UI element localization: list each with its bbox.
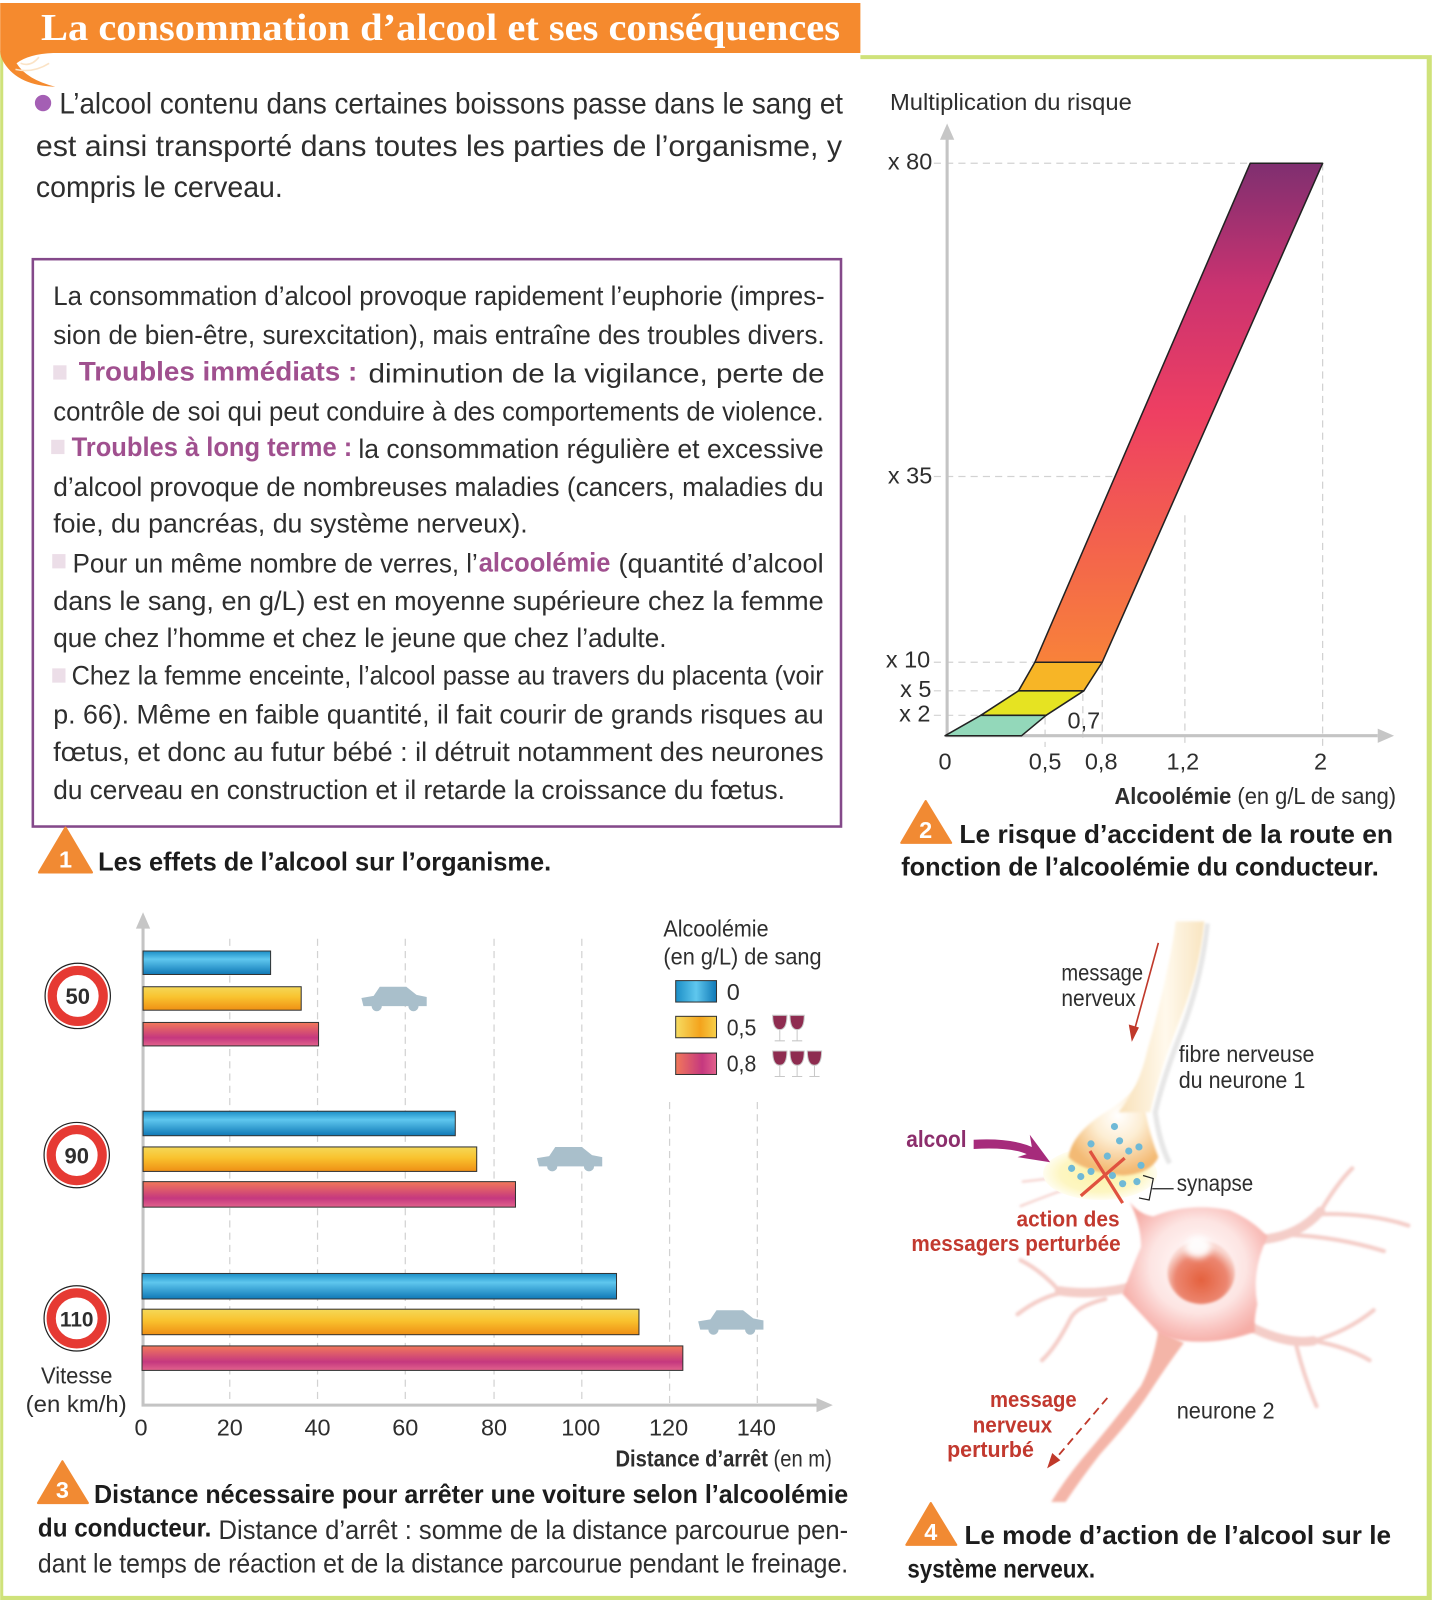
panel: effets de l'alcool: contrôle de soi qui peut conduire à des comportements de violence.: [53, 396, 824, 426]
icon: two wine glasses: [773, 1015, 804, 1041]
bars 50 km/h: [143, 951, 319, 1046]
chart: risque d'accident: x 35: [888, 463, 932, 489]
legend: (en g/L) de sang: [663, 943, 822, 969]
x axis labels: [134, 1415, 776, 1441]
y axis title: [26, 1363, 127, 1417]
caption 3: Distance d’arrêt : somme de la distance parcourue pen-: [219, 1515, 848, 1545]
neuron labels: [906, 960, 1314, 1462]
grid lines: [934, 163, 1323, 747]
panel: effets de l'alcool: [33, 259, 841, 827]
panel: effets de l'alcool: diminution de la vigilance, perte de: [369, 359, 825, 389]
x axis labels: 0,7: [1068, 708, 1100, 734]
x axis title: Distance d’arrêt (en m): [615, 1445, 832, 1471]
x axis labels: 0: [134, 1415, 148, 1441]
title banner: [0, 3, 860, 87]
y axis title: (en km/h): [26, 1391, 127, 1417]
bars 110 km/h: [142, 1273, 683, 1370]
panel: effets de l'alcool: Troubles à long terme :: [72, 432, 352, 462]
intro text: [35, 87, 843, 204]
chart: risque d'accident: 0,8: [1085, 748, 1118, 774]
caption 2: 2: [919, 817, 932, 843]
caption 4: système nerveux.: [907, 1556, 1095, 1584]
panel: effets de l'alcool: La consommation d’alcool provoque rapidement l’euphorie (impres-: [53, 281, 825, 311]
icon: car 90: [537, 1147, 602, 1171]
neuron labels: fibre nerveuse: [1179, 1041, 1314, 1067]
caption 4: [906, 1503, 1391, 1584]
axes: [143, 927, 817, 1405]
panel: effets de l'alcool: fœtus, et donc au futur bébé : il détruit notamment des neurones: [53, 737, 824, 767]
chart: risque d'accident: x 5: [900, 676, 931, 702]
caption 3: Distance nécessaire pour arrêter une voiture selon l’alcoolémie: [94, 1481, 848, 1509]
caption 4: 4: [924, 1519, 937, 1545]
risk band: [945, 163, 1323, 736]
x axis labels: 60: [392, 1415, 418, 1441]
arrow: message perturbé: [1047, 1398, 1107, 1468]
icon: car 50: [361, 987, 427, 1011]
synaptic glow: [1043, 1147, 1157, 1200]
corps cellulaire: [1123, 1202, 1268, 1342]
chart: risque d'accident: 1,2: [1167, 748, 1199, 774]
y axis title: Multiplication du risque: [890, 89, 1132, 115]
panel: effets de l'alcool: que chez l’homme et chez le jeune que chez l’adulte.: [53, 623, 667, 653]
caption 2: [901, 801, 1393, 882]
legend: 0,8: [727, 1050, 756, 1076]
legend: [663, 916, 822, 1077]
axes: [947, 133, 1378, 736]
chart: risque d'accident: x 2: [899, 700, 930, 726]
icon: speed sign 50: [45, 963, 110, 1029]
panel: effets de l'alcool: Pour un même nombre de verres, l’: [73, 548, 478, 578]
chart: risque d'accident: 2: [1314, 748, 1327, 774]
panel: effets de l'alcool: sion de bien-être, surexcitation), mais entraîne des troubles divers.: [53, 320, 825, 350]
icon: speed sign 110: 110: [60, 1308, 94, 1332]
bars 90 km/h: [143, 1111, 515, 1207]
icon: red cross: [1081, 1151, 1125, 1203]
caption 1: 1: [59, 846, 72, 872]
fibre nerveuse du neurone 1: [1119, 921, 1204, 1112]
caption 1: [39, 828, 551, 876]
intro text: L’alcool contenu dans certaines boissons passe dans le sang et: [59, 87, 843, 120]
neuron labels: neurone 2: [1177, 1397, 1275, 1423]
axone: [1051, 1331, 1184, 1502]
dendrites: [1018, 1168, 1408, 1406]
arrow: message nerveux: [1129, 943, 1158, 1042]
grey fibre shadow: [1155, 923, 1207, 1163]
chart: risque d'accident: x 10: [886, 646, 930, 672]
icon: speed sign 90: 90: [64, 1143, 89, 1168]
caption 2: Le risque d’accident de la route en: [959, 821, 1393, 849]
diagram: neurones et synapse: [906, 921, 1408, 1502]
panel: effets de l'alcool: p. 66). Même en faible quantité, il fait courir de grands risques au: [53, 699, 824, 729]
y axis labels: x 80: [888, 148, 932, 174]
caption 3: 3: [56, 1477, 69, 1503]
neuron labels: alcool: [906, 1126, 967, 1152]
intro text: est ainsi transporté dans toutes les parties de l’organisme, y: [36, 130, 842, 163]
x axis labels: 20: [217, 1415, 243, 1441]
caption 4: Le mode d’action de l’alcool sur le: [964, 1522, 1391, 1550]
arrow: alcool: [974, 1135, 1050, 1162]
neuron labels: messagers perturbée: [911, 1231, 1121, 1256]
neuron labels: action des: [1017, 1207, 1120, 1232]
x axis labels: 120: [649, 1415, 688, 1441]
panel: effets de l'alcool: foie, du pancréas, du système nerveux).: [53, 509, 528, 539]
panel: effets de l'alcool: Troubles immédiats :: [79, 357, 357, 387]
vésicules: [1068, 1123, 1145, 1187]
neuron labels: nerveux: [973, 1413, 1053, 1438]
caption 3: dant le temps de réaction et de la distance parcourue pendant le freinage.: [38, 1548, 848, 1578]
chart: risque d'accident: [886, 89, 1396, 809]
caption 3: du conducteur.: [38, 1515, 211, 1543]
neuron labels: nerveux: [1061, 985, 1136, 1011]
intro text: compris le cerveau.: [36, 171, 283, 204]
x axis labels: 80: [481, 1415, 507, 1441]
icon: speed sign 90: [44, 1122, 109, 1188]
x axis labels: 140: [737, 1415, 776, 1441]
neuron labels: synapse: [1177, 1170, 1253, 1196]
synapse bracket: [1139, 1176, 1174, 1200]
x axis labels: 40: [304, 1415, 331, 1441]
panel: effets de l'alcool: dans le sang, en g/L) est en moyenne supérieure chez la femme: [53, 586, 824, 616]
panel: effets de l'alcool: (quantité d’alcool: [619, 548, 824, 578]
grid lines: [230, 939, 757, 1405]
legend: 0,5: [727, 1015, 756, 1041]
panel: effets de l'alcool: Chez la femme enceinte, l’alcool passe au travers du placenta (voir: [72, 661, 824, 691]
legend: 0: [727, 979, 740, 1005]
neuron labels: message: [1061, 960, 1143, 986]
chart: distance d'arrêt: [26, 912, 833, 1471]
title banner: La consommation d’alcool et ses conséquences: [41, 7, 840, 49]
panel: effets de l'alcool: du cerveau en construction et il retarde la croissance du fœtus.: [53, 775, 785, 805]
x axis title: Alcoolémie (en g/L de sang): [1114, 783, 1396, 809]
chart: risque d'accident: 0: [939, 748, 952, 774]
icon: intro bullet: [35, 95, 51, 111]
neuron labels: perturbé: [947, 1437, 1034, 1462]
caption 2: fonction de l’alcoolémie du conducteur.: [901, 854, 1379, 882]
icon: three wine glasses: [773, 1051, 822, 1077]
icon: speed sign 50: 50: [65, 984, 90, 1009]
bouton du neurone 1: [1069, 1082, 1158, 1176]
chart: risque d'accident: 0,5: [1029, 748, 1061, 774]
neuron labels: du neurone 1: [1179, 1067, 1305, 1093]
noyau: [1168, 1236, 1235, 1304]
panel: effets de l'alcool: d’alcool provoque de nombreuses maladies (cancers, maladies du: [53, 472, 824, 502]
neuron labels: message: [990, 1387, 1077, 1412]
caption 3: [38, 1461, 848, 1578]
caption 1: Les effets de l’alcool sur l’organisme.: [98, 848, 551, 876]
panel: effets de l'alcool: la consommation régulière et excessive: [358, 434, 824, 464]
y axis title: Vitesse: [41, 1363, 112, 1389]
x axis labels: 100: [561, 1415, 600, 1441]
icon: speed sign 110: [44, 1286, 109, 1351]
icon: car 110: [698, 1310, 763, 1335]
panel: effets de l'alcool: alcoolémie: [479, 547, 610, 577]
legend: Alcoolémie: [663, 916, 769, 942]
